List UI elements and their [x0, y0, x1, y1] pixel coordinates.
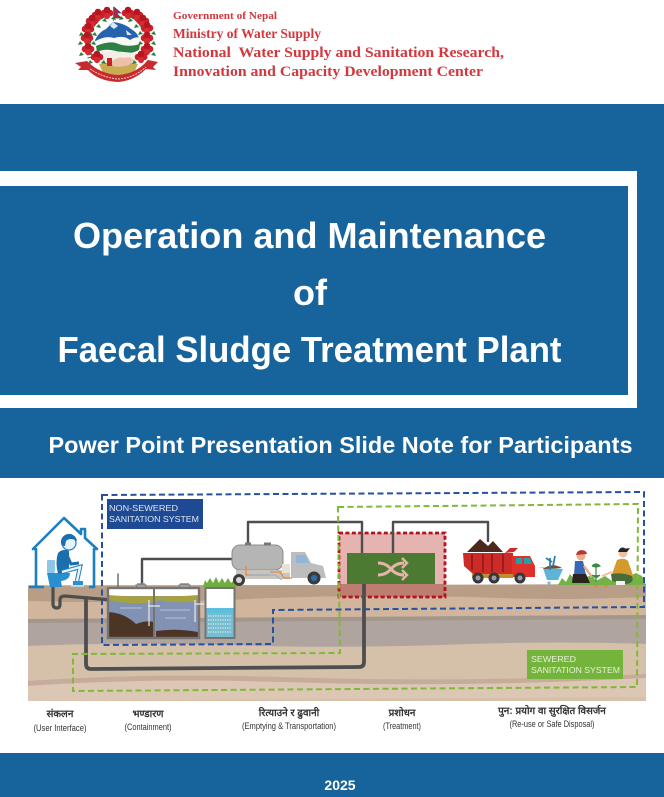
- blue title band: [0, 104, 664, 478]
- stage: reuse or safe disposal: पुन: प्रयोग वा सुरक्षित विसर्जन: [497, 704, 606, 717]
- soak pit: [206, 588, 234, 638]
- label: non-sewered sanitation system: NON-SEWERED: [109, 503, 178, 513]
- sanitation chain diagram: [28, 492, 646, 733]
- vacuum tanker truck: [232, 542, 326, 586]
- label: non-sewered sanitation system: SANITATION SYSTEM: [109, 514, 199, 524]
- main title: of: [293, 272, 328, 313]
- seedlings: [592, 564, 600, 582]
- stage: emptying and transportation: [242, 706, 336, 731]
- stage: user interface: [34, 708, 86, 733]
- white title frame: [0, 171, 637, 408]
- red ribbon: [75, 60, 158, 82]
- main title: Faecal Sludge Treatment Plant: [58, 329, 562, 370]
- label: sewered sanitation system: [527, 650, 623, 679]
- house with user on toilet: [29, 518, 97, 587]
- label: non-sewered sanitation system: [107, 499, 203, 529]
- treatment box: [339, 533, 445, 597]
- emblem: Government of Nepal coat of arms: [75, 7, 158, 82]
- septic tank and soak pit: [108, 577, 236, 638]
- header text: issuing organisation: [173, 11, 504, 80]
- reuse: cart, gardeners and plants: [538, 548, 646, 588]
- label: sewered sanitation system: SANITATION SYSTEM: [531, 665, 620, 675]
- grass: [203, 577, 236, 587]
- label: sewered sanitation system: SEWERED: [531, 654, 576, 664]
- title panel: [0, 186, 628, 395]
- stage: emptying and transportation: रित्याउने र ढुवानी: [258, 706, 320, 719]
- header text: issuing organisation: Innovation and Capacity Development Center: [173, 64, 483, 80]
- main title: Operation and Maintenance: [73, 215, 546, 256]
- stage: reuse or safe disposal: (Re-use or Safe Disposal): [510, 719, 594, 729]
- stage: treatment: [383, 706, 421, 731]
- gardener woman: [602, 548, 634, 585]
- header text: issuing organisation: National Water Supply and Sanitation Research,: [173, 45, 504, 61]
- subtitle: Power Point Presentation Slide Note for Participants: [48, 432, 632, 458]
- icon: crossing arrows: [378, 558, 407, 580]
- seated person: [62, 536, 76, 550]
- dump truck with treated sludge: [463, 539, 535, 584]
- rhododendron wreath: [78, 7, 156, 64]
- pipes: [53, 522, 488, 669]
- stage: treatment: (Treatment): [383, 721, 421, 731]
- stage: reuse or safe disposal: [497, 704, 606, 729]
- stage: containment: (Containment): [124, 722, 172, 732]
- stage: user interface: संकलन: [46, 708, 74, 720]
- treatment unit: [347, 553, 435, 584]
- main title: [58, 215, 562, 370]
- year: 2025: [324, 777, 356, 793]
- stage: user interface: (User Interface): [34, 723, 86, 733]
- non-sewered system boundary: [102, 492, 644, 645]
- stage: emptying and transportation: (Emptying & Transportation): [242, 721, 336, 731]
- sewered system boundary: [73, 504, 638, 691]
- ground layers: [28, 584, 646, 701]
- stage: containment: [124, 709, 172, 732]
- stage: containment: भण्डारण: [132, 709, 164, 720]
- header text: issuing organisation: Ministry of Water Supply: [173, 27, 321, 42]
- national flag: [113, 7, 121, 21]
- stage: treatment: प्रशोधन: [388, 706, 416, 719]
- chain stage labels: [34, 704, 606, 733]
- gardener boy: [572, 550, 592, 583]
- toilet: [47, 560, 55, 573]
- header text: issuing organisation: Government of Nepal: [173, 11, 277, 22]
- footer band: [0, 753, 664, 797]
- mountain and landscape: [94, 22, 141, 76]
